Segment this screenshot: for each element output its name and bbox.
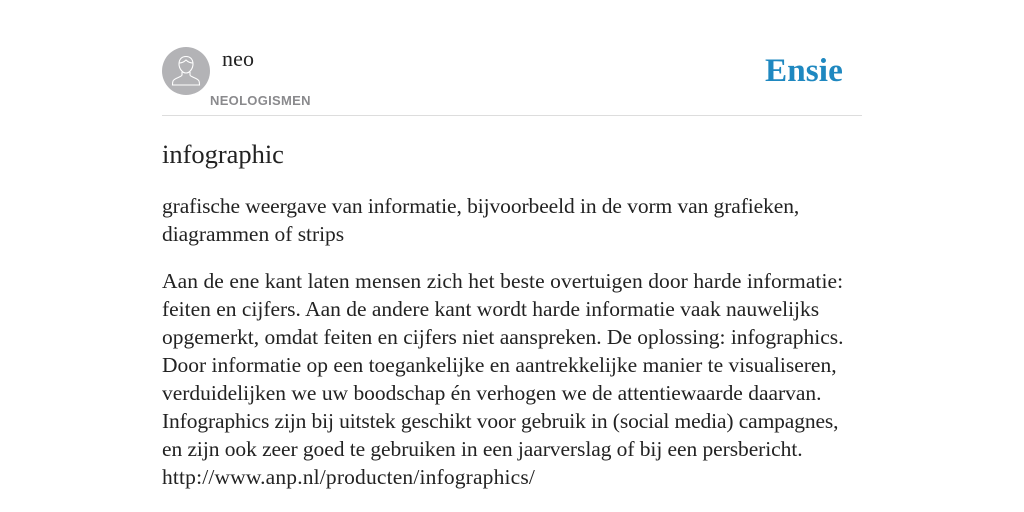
- header: [162, 40, 862, 116]
- example paragraph: feiten en cijfers. Aan de andere kant wordt harde informatie vaak nauwelijks: [162, 297, 819, 321]
- definition: diagrammen of strips: [162, 222, 344, 246]
- definition: grafische weergave van informatie, bijvoorbeeld in de vorm van grafieken,: [162, 194, 799, 218]
- logo: Ensie: Ensie: [765, 52, 843, 89]
- example paragraph: http://www.anp.nl/producten/infographics/: [162, 465, 535, 489]
- icon: user avatar: [162, 47, 210, 95]
- title: infographic: [162, 139, 284, 169]
- example paragraph: [162, 269, 843, 489]
- example paragraph: en zijn ook zeer goed te gebruiken in een jaarverslag of bij een persbericht.: [162, 437, 803, 461]
- example paragraph: Infographics zijn bij uitstek geschikt voor gebruik in (social media) campagnes,: [162, 409, 838, 433]
- author name: neo: [222, 46, 254, 71]
- category label: NEOLOGISMEN: [210, 93, 311, 108]
- definition: [162, 194, 799, 246]
- example paragraph: opgemerkt, omdat feiten en cijfers niet aanspreken. De oplossing: infographics.: [162, 325, 843, 349]
- example paragraph: Door informatie op een toegankelijke en aantrekkelijke manier te visualiseren,: [162, 353, 837, 377]
- example paragraph: Aan de ene kant laten mensen zich het beste overtuigen door harde informatie:: [162, 269, 843, 293]
- example paragraph: verduidelijken we uw boodschap én verhogen we de attentiewaarde daarvan.: [162, 381, 822, 405]
